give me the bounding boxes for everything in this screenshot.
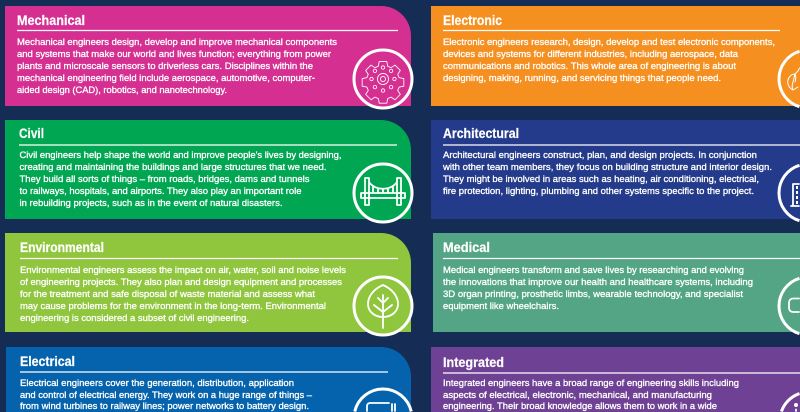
icon: leaf	[354, 277, 412, 335]
text block: Mechanical description: Mechanical engineers design, develop and improve mechanical components	[17, 36, 337, 47]
icon: building	[779, 165, 800, 221]
heading: Architectural: Architectural	[443, 126, 519, 141]
text block: Electronic description: Electronic engineers research, design, develop and test electronic components,	[443, 36, 775, 47]
heading: Civil: Civil	[19, 126, 44, 141]
heading: Environmental: Environmental	[20, 240, 104, 255]
text block: Electronic description	[443, 36, 775, 83]
text block: Civil description	[20, 149, 342, 208]
text block: Integrated description: engineering. Their broad knowledge allows them to work in a wide	[443, 400, 717, 411]
text block: Electrical description: and control of electrical energy. They work on a huge range of things –	[20, 389, 313, 400]
text block: Architectural description	[442, 149, 772, 196]
text block: Medical description	[443, 264, 753, 311]
heading: Mechanical: Mechanical	[17, 13, 85, 28]
text block: Electronic description: communications and robotics. This whole area of engineering is about	[443, 60, 736, 71]
text block: Electrical description: from wind turbines to railway lines; power networks to battery design.	[20, 400, 309, 411]
text block: Environmental description: engineering is considered a subset of civil engineering.	[20, 312, 249, 323]
text block: Environmental description	[20, 264, 346, 323]
text block: Civil description: in rebuilding projects, such as in the event of natural disasters.	[20, 197, 282, 208]
text block: Integrated description: aspects of electrical, electronic, mechanical, and manufacturing	[443, 389, 712, 400]
text block: Electronic description: designing, making, running, and servicing things that people need.	[443, 72, 721, 83]
text block: Mechanical description: plants and microscale sensors to driverless cars. Disciplines within the	[17, 60, 313, 71]
panel: Electrical	[6, 347, 411, 412]
panel: Medical	[433, 233, 800, 334]
text block: Medical description: 3D organ printing, prosthetic limbs, wearable technology, and specialist	[443, 288, 743, 299]
text block: Electrical description	[20, 377, 313, 411]
text block: Environmental description: for the treatment and safe disposal of waste material and assess what	[20, 288, 315, 299]
panel: Mechanical	[5, 6, 412, 108]
icon: bridge	[354, 164, 412, 222]
text block: Civil description: to railways, hospitals, and airports. They also play an important role	[20, 185, 302, 196]
text block: Medical description: the innovations that improve our health and healthcare systems, including	[443, 276, 753, 287]
text block: Integrated description: Integrated engineers have a broad range of engineering skills including	[443, 377, 739, 388]
text block: Medical description: Medical engineers transform and save lives by researching and evolving	[443, 264, 744, 275]
text block: Civil description: They build all sorts of things – from roads, bridges, dams and tunnels	[20, 173, 310, 184]
panel: Architectural	[431, 120, 800, 221]
text block: Electrical description: Electrical engineers cover the generation, distribution, application	[20, 377, 294, 388]
text block: Mechanical description: and systems that make our world and lives function; everything from power	[17, 48, 331, 59]
text block: Architectural description: with other team members, they focus on building structure and interior design.	[442, 161, 772, 172]
text block: Civil description: creating and maintaining the buildings and large structures that we need.	[20, 161, 326, 172]
text block: Environmental description: of engineering projects. They also plan and design equipment and processes	[20, 276, 342, 287]
text block: Mechanical description: mechanical engineering field include aerospace, automotive, computer-	[17, 72, 315, 83]
text block: Environmental description: may cause problems for the environment in the long-term. Environmental	[20, 300, 326, 311]
text block: Medical description: equipment like wheelchairs.	[443, 300, 559, 311]
text block: Architectural description: fire protection, lighting, plumbing and other systems specific to the project.	[443, 185, 754, 196]
text block: Architectural description: Architectural engineers construct, plan, and design projects. In conjunction	[443, 149, 757, 160]
text block: Integrated description	[443, 377, 739, 411]
text block: Electronic description: devices and systems for different industries, including aerospace, data	[443, 48, 739, 59]
icon: battery	[355, 389, 411, 412]
panel: Environmental	[5, 233, 412, 335]
text block: Architectural description: They might be involved in areas such as heating, air conditioning, electrical,	[443, 173, 759, 184]
icon: medical	[779, 278, 800, 334]
icon: electronic circuit	[779, 51, 800, 107]
panel: Electronic	[431, 6, 800, 107]
heading: Electrical: Electrical	[20, 354, 75, 369]
heading: Medical: Medical	[443, 240, 490, 255]
panel: Civil	[5, 120, 412, 222]
icon: gear	[354, 50, 412, 108]
text block: Mechanical description	[17, 36, 337, 95]
text block: Civil description: Civil engineers help shape the world and improve people's lives by designing,	[20, 149, 342, 160]
icon: integrated	[781, 394, 800, 412]
text block: Mechanical description: aided design (CAD), robotics, and nanotechnology.	[17, 84, 227, 95]
panel: Integrated	[431, 347, 800, 412]
heading: Electronic: Electronic	[443, 13, 502, 28]
text block: Environmental description: Environmental engineers assess the impact on air, water, soil and noise levels	[20, 264, 346, 275]
heading: Integrated: Integrated	[443, 355, 504, 370]
